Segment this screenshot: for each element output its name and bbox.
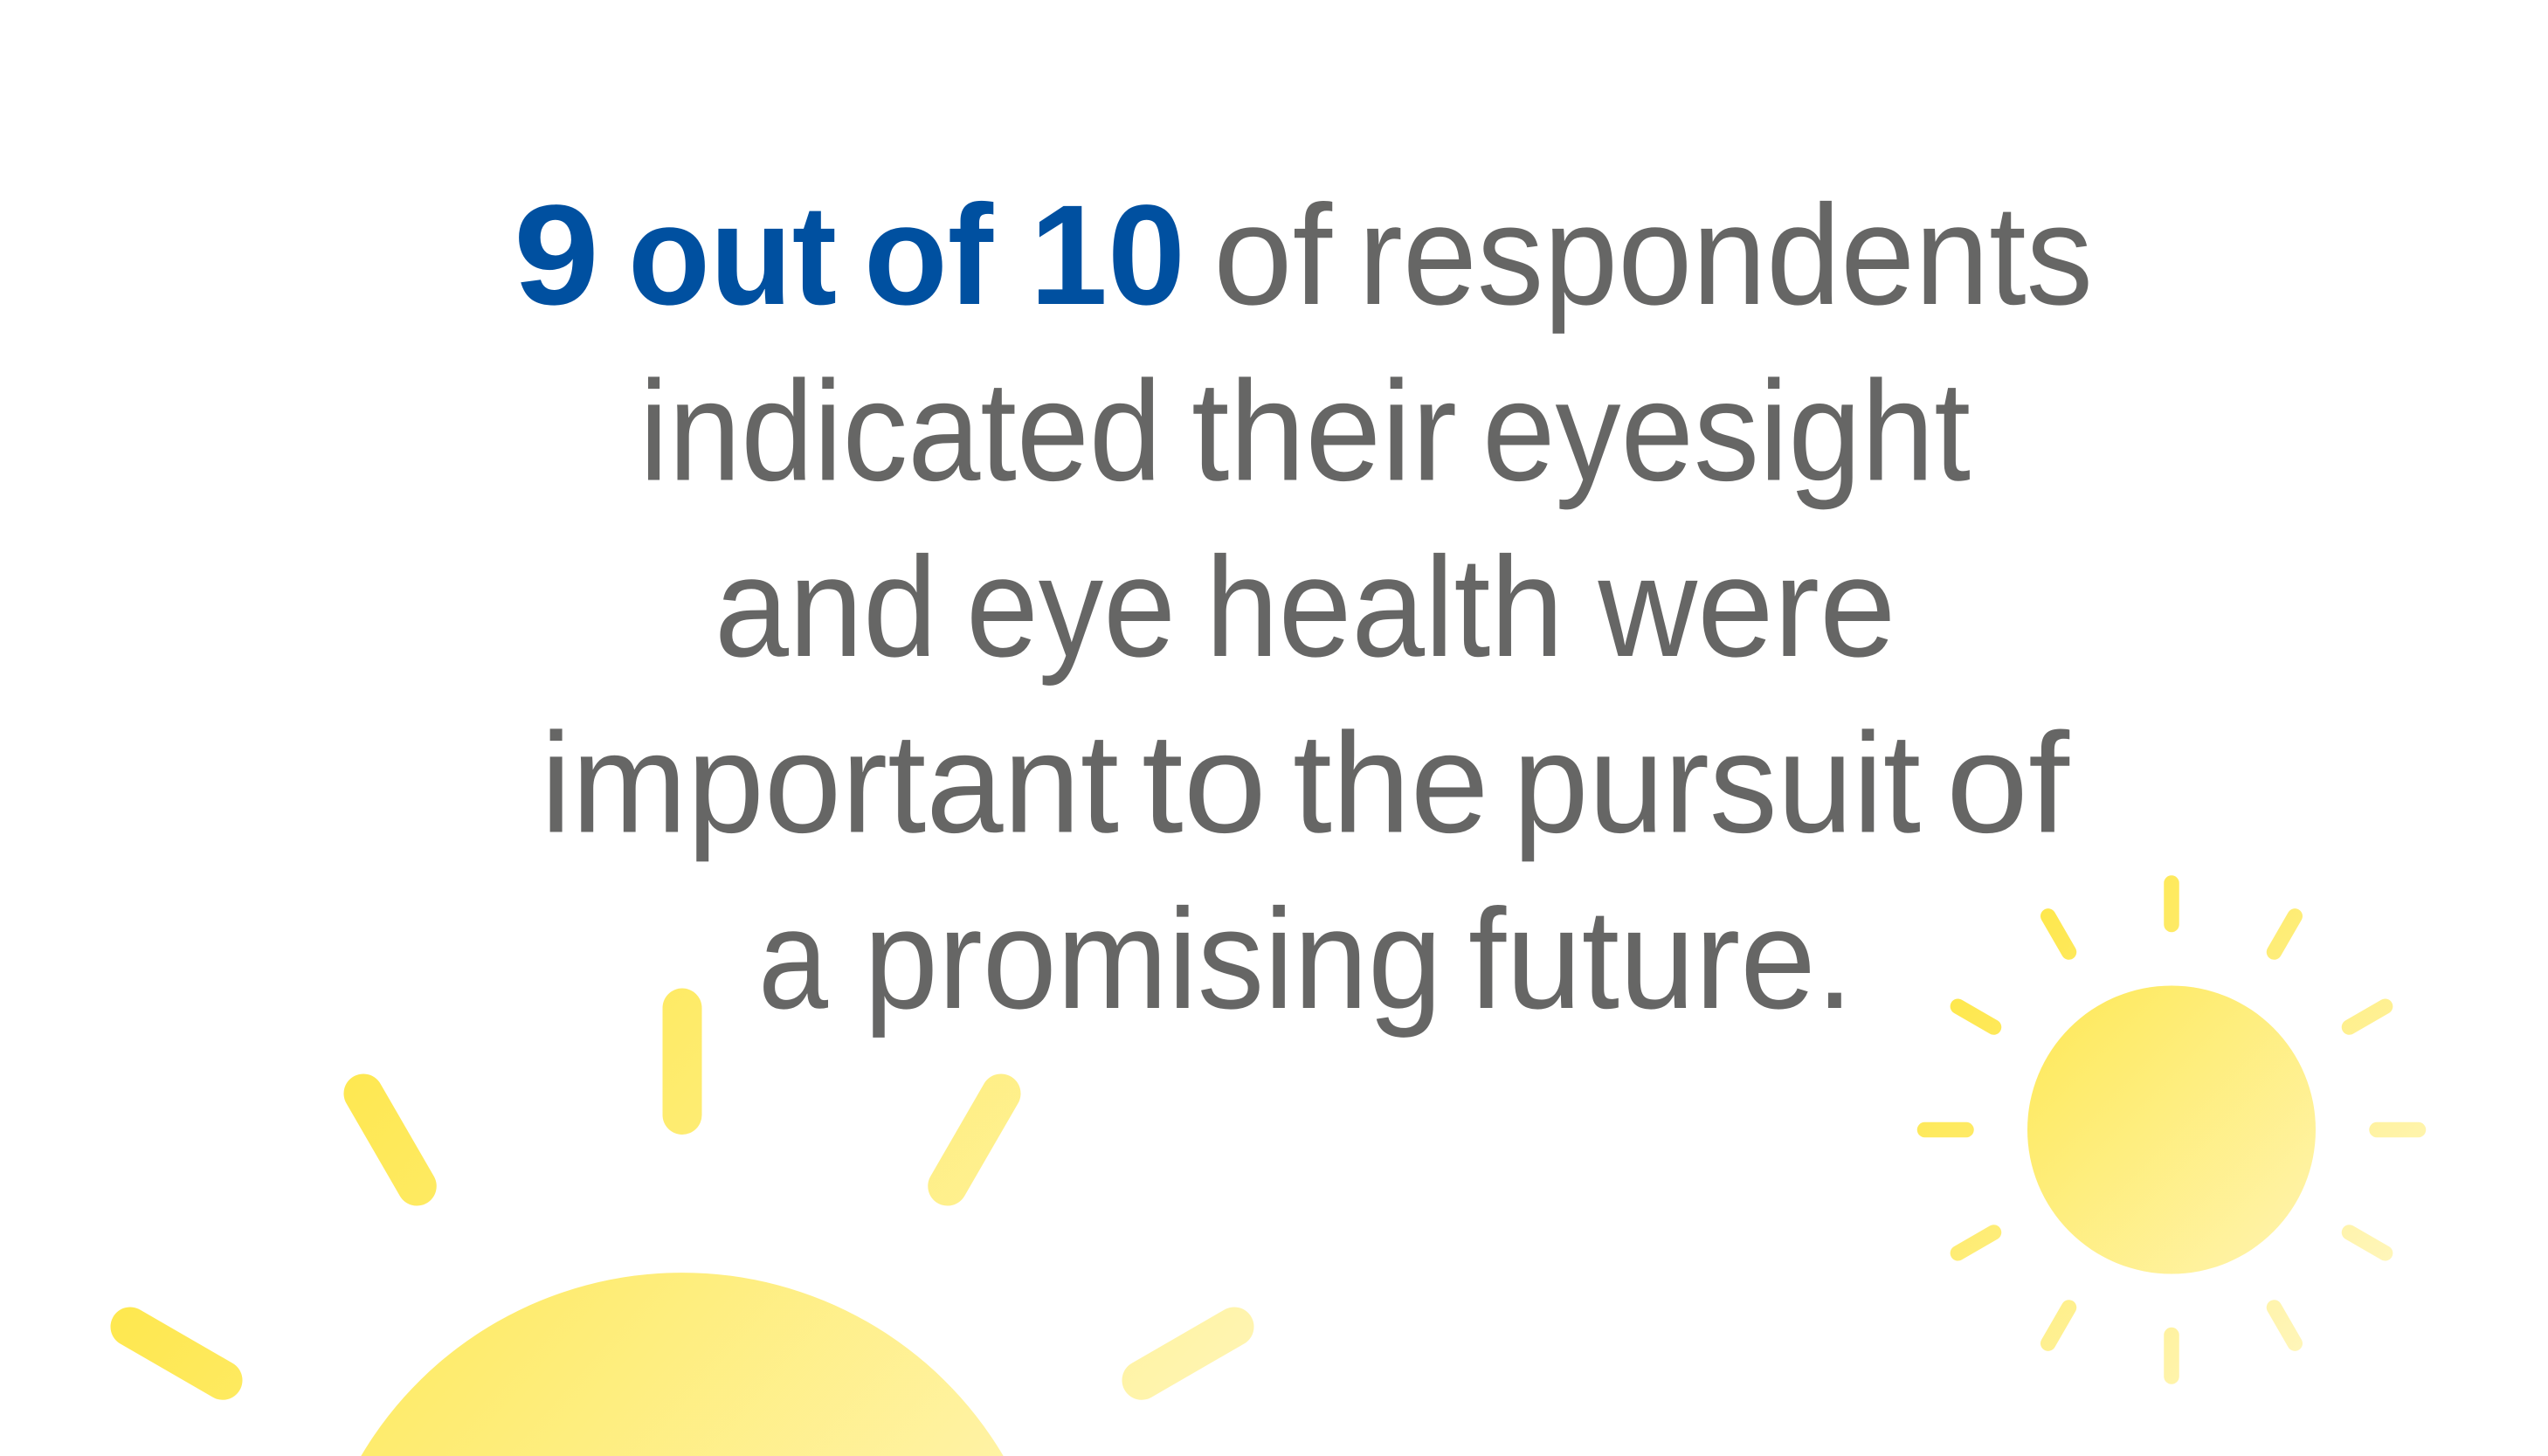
line 1: highlighted statistic	[514, 175, 1185, 335]
line 4: of	[1946, 702, 2070, 863]
line 2: indicated	[639, 351, 1162, 510]
line 3	[715, 527, 1895, 687]
line 5: promising	[864, 879, 1442, 1039]
small sun disc	[2027, 985, 2316, 1273]
line 1: highlighted statistic: 9	[514, 175, 599, 335]
line 1: highlighted statistic: out	[628, 175, 837, 335]
line 3: health	[1205, 527, 1564, 687]
line 1: highlighted statistic: 10	[1030, 175, 1185, 335]
line 1: continuation: respondents	[1358, 175, 2093, 335]
line 2	[639, 351, 1971, 510]
icon: large sun, bottom left	[130, 1008, 1234, 1456]
large sun disc	[361, 1273, 1004, 1456]
line 3: eye	[966, 527, 1176, 687]
line 4: the	[1293, 702, 1488, 863]
line 5: a	[758, 879, 828, 1039]
line 2: their	[1191, 351, 1457, 510]
line 4: pursuit	[1513, 702, 1921, 863]
line 2: eyesight	[1482, 351, 1971, 510]
line 5	[758, 879, 1854, 1039]
small sun rays	[1925, 883, 2418, 1377]
line 3: and	[715, 527, 937, 687]
line 1: continuation: of	[1213, 175, 1333, 335]
icon: small sun, right	[1925, 883, 2418, 1377]
line 4: important	[541, 702, 1119, 863]
line 4	[541, 702, 2070, 863]
line 3: were	[1598, 527, 1895, 687]
main statement text	[514, 175, 2093, 1039]
line 5: future.	[1468, 879, 1854, 1039]
large sun rays	[130, 1008, 1234, 1380]
line 1: highlighted statistic: of	[864, 175, 994, 335]
line 4: to	[1142, 702, 1267, 863]
